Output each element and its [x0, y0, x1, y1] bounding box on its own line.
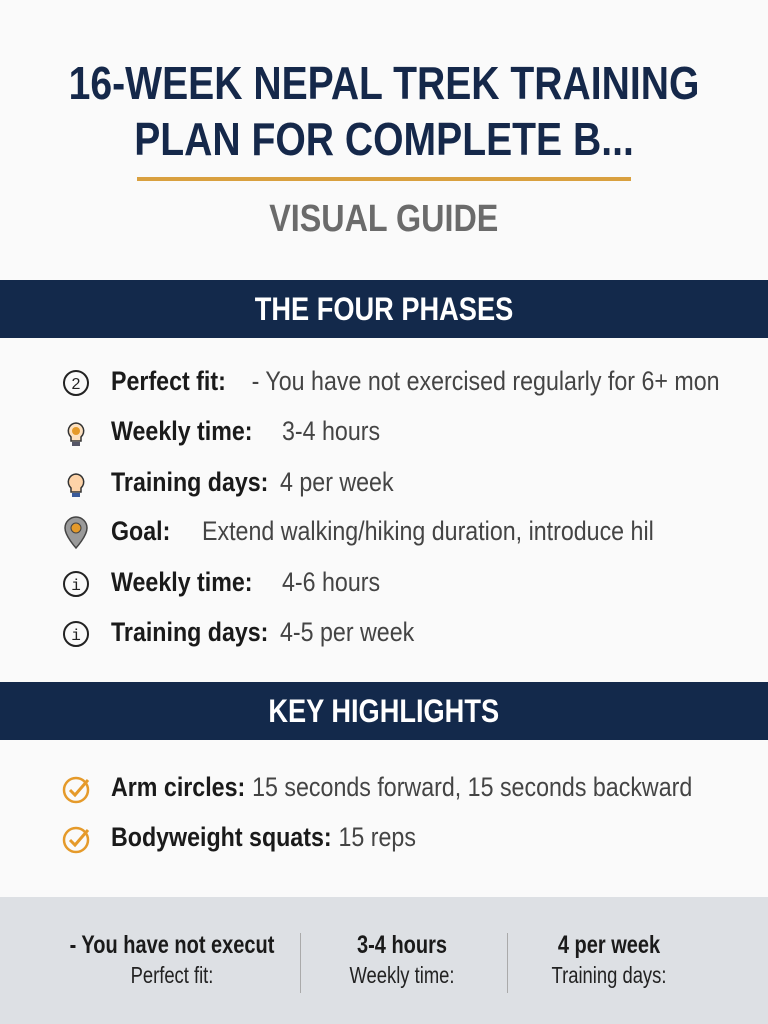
icon: info: i: [71, 627, 81, 645]
list: phases: Extend walking/hiking duration, introduce hil: [202, 516, 654, 546]
icon: check: [62, 826, 90, 854]
list: phases: [63, 366, 720, 647]
stat: perfect fit: [70, 931, 274, 988]
subtitle: VISUAL GUIDE: [269, 198, 499, 240]
icon: bulb: [68, 473, 84, 497]
icon: bulb: [68, 422, 84, 446]
footer stats: [0, 897, 768, 1024]
gold divider: [137, 177, 631, 181]
list: phases: 4-5 per week: [280, 617, 414, 647]
row: weekly time 2: Weekly time:: [111, 567, 253, 597]
stat: perfect fit: Perfect fit:: [131, 962, 213, 988]
title: 16-WEEK NEPAL TREK TRAINING: [69, 57, 699, 109]
row: training days 2: Training days:: [111, 617, 268, 647]
row: training days: Training days:: [111, 467, 268, 497]
icon: map pin: [64, 516, 88, 549]
icon: number 2: [63, 370, 89, 396]
icon: number 2: 2: [72, 376, 81, 393]
band: key highlights: [0, 682, 768, 740]
icon: check: [62, 776, 90, 804]
stat: weekly time: Weekly time:: [350, 962, 454, 988]
list: phases: 4 per week: [280, 467, 394, 497]
stat: training days: Training days:: [552, 962, 666, 988]
band: the four phases: [0, 280, 768, 338]
list: phases: 3-4 hours: [282, 416, 380, 446]
icon: info: [63, 621, 89, 647]
list: phases: 4-6 hours: [282, 567, 380, 597]
title: PLAN FOR COMPLETE B...: [134, 113, 634, 165]
stat: weekly time: 3-4 hours: [357, 931, 447, 959]
stat: weekly time: [350, 931, 454, 988]
row: weekly time: Weekly time:: [111, 416, 253, 446]
icon: info: i: [71, 577, 81, 595]
icon: info: [63, 571, 89, 597]
row: arm circles: Arm circles: 15 seconds forward, 15 seconds backward: [111, 772, 692, 802]
row: goal: Goal:: [111, 516, 170, 546]
stat: perfect fit: - You have not execut: [70, 931, 274, 959]
list: highlights: [62, 772, 692, 854]
row: perfect fit: Perfect fit: - You have not exercised regularly for 6+ mon: [111, 366, 720, 396]
stat: training days: [552, 931, 666, 988]
row: bodyweight squats: Bodyweight squats: 15 reps: [111, 822, 416, 852]
title: [69, 57, 699, 165]
band: key highlights: KEY HIGHLIGHTS: [269, 693, 499, 729]
band: the four phases: THE FOUR PHASES: [255, 291, 513, 327]
stat: training days: 4 per week: [558, 931, 660, 959]
